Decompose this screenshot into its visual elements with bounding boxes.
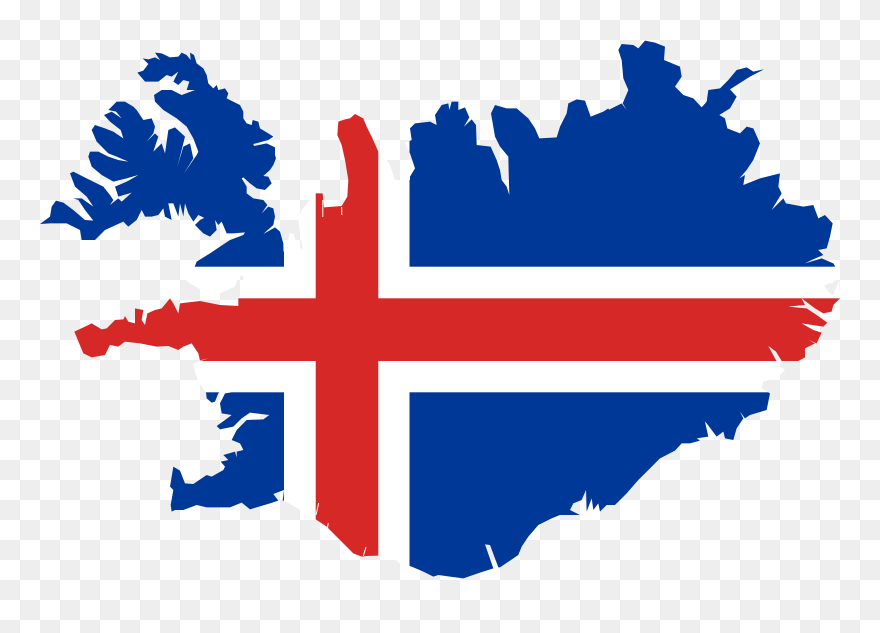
flag: blue north-west quarter — [40, 52, 284, 267]
flag: blue south-east quarter — [410, 392, 770, 578]
flag: red horizontal bar — [74, 298, 840, 361]
flag: white field — [186, 141, 840, 563]
map: Iceland silhouette with flag fill — [40, 40, 840, 578]
flag: red vertical bar — [316, 114, 378, 557]
fjord slits in the red bar — [316, 200, 366, 556]
flag: blue south-west quarter — [170, 392, 284, 512]
flag: blue north-east quarter — [410, 40, 835, 267]
